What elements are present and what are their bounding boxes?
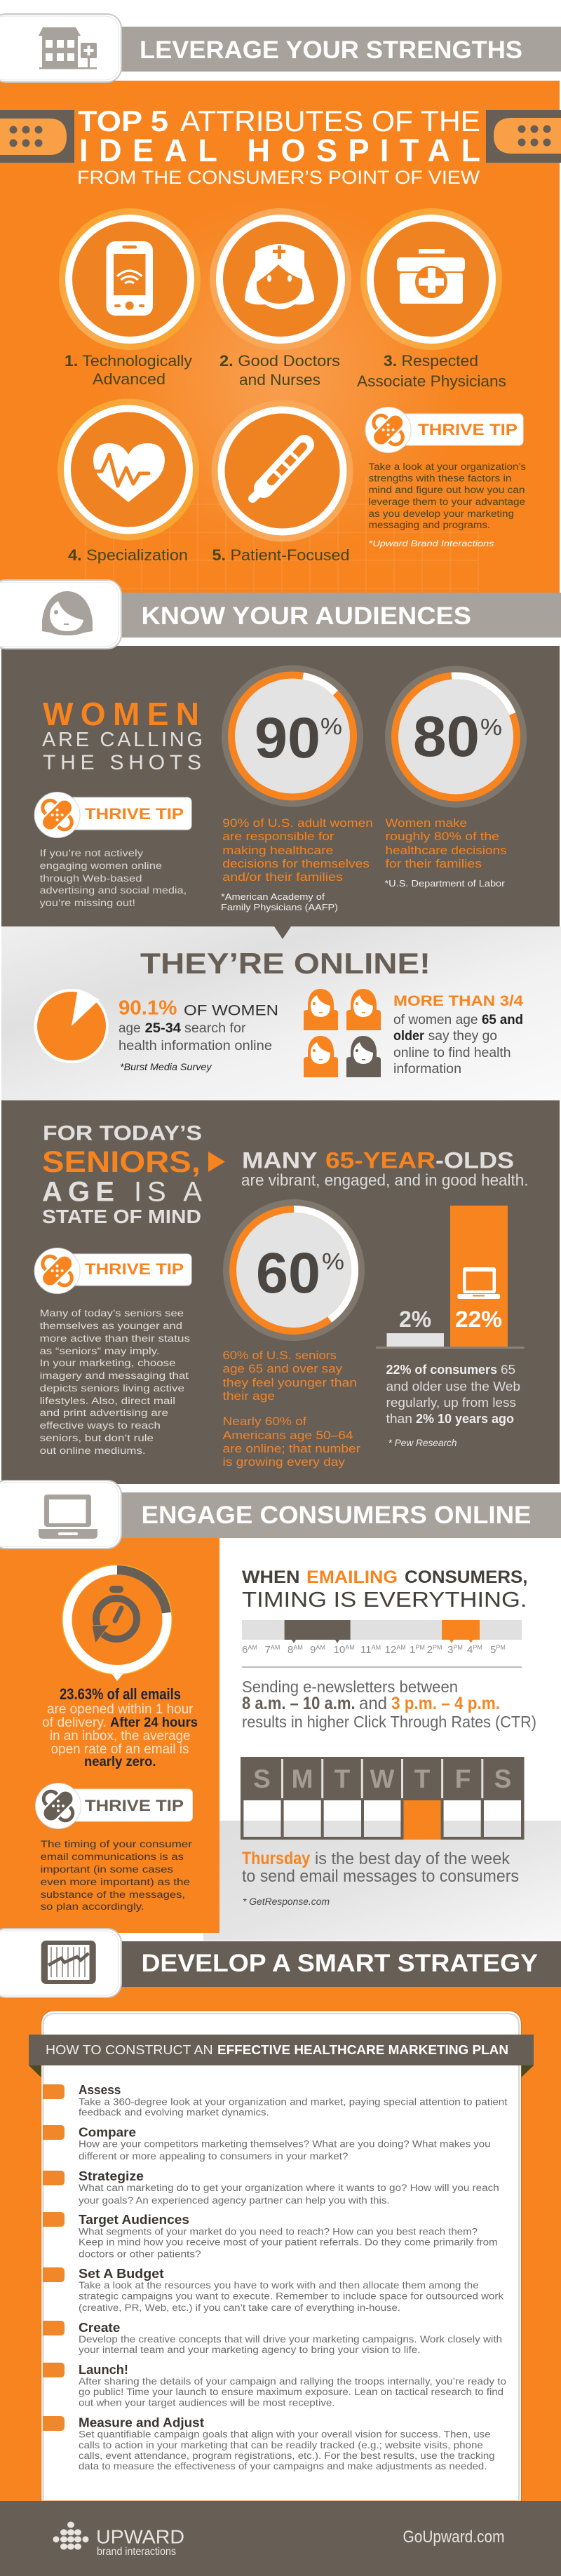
- stat text: 90 percent: are responsible for: [222, 830, 334, 843]
- timeline chart: PM: [415, 1644, 425, 1651]
- stat: 90.1 percent of women: *Burst Media Survey: [120, 1062, 212, 1072]
- panel: women are calling the shots: [1, 646, 560, 926]
- donut: 80 percent: %: [480, 714, 502, 740]
- panel: gray backdrop: [203, 1821, 561, 1941]
- stat: email open rates: After 24 hours: [110, 1715, 198, 1730]
- step: launch: After sharing the details of your campaign and rallying the troops internally, you’re ready to: [79, 2376, 506, 2387]
- stat text: 90 percent: decisions for themselves: [222, 857, 370, 870]
- thrive tip 4: substance of the messages,: [41, 1889, 185, 1900]
- step: launch: go public! Time your launch to ensure maximum exposure. Lean on tactical research to find: [79, 2387, 503, 2397]
- thrive tip 2: THRIVE TIP: [85, 805, 184, 823]
- timeline chart: AM: [396, 1644, 406, 1651]
- thrive tip 1: [365, 407, 526, 548]
- stat: email open rates: in an inbox, the average: [50, 1729, 191, 1744]
- thrive tip 3: out online mediums.: [40, 1445, 146, 1456]
- step: measure and adjust: data to measure the effectiveness of your campaigns and make adjustments as needed.: [79, 2461, 487, 2472]
- thrive tip 3: imagery and messaging that: [40, 1370, 189, 1381]
- thrive tip 4: The timing of your consumer: [41, 1839, 193, 1849]
- step: measure and adjust: calls, event attendance, program registrations, etc.). For the best results, use the tracking: [79, 2450, 495, 2461]
- thrive tip 1: Take a look at your organization’s: [369, 461, 526, 472]
- thrive tip 3: [34, 1248, 191, 1456]
- section header: develop a smart strategy: [0, 1929, 561, 1997]
- step: target audiences: Keep in mind how you receive most of your patient referrals. Do they come primarily from: [79, 2237, 498, 2248]
- headline many 65-year-olds: are vibrant, engaged, and in good health.: [241, 1171, 529, 1189]
- ribbon heading: HOW TO CONSTRUCT AN: [46, 2043, 213, 2057]
- headline many 65-year-olds: [241, 1148, 529, 1189]
- stat text: 90 percent: Family Physicians (AAFP): [221, 902, 338, 912]
- text: e-newsletter timing: 8 a.m. – 10 a.m.: [242, 1694, 356, 1713]
- donut: 90 percent: %: [320, 713, 342, 739]
- attribute 1: technologically advanced: 1. Technologically: [65, 352, 192, 370]
- headline seniors: FOR TODAY’S: [43, 1122, 202, 1145]
- step: create: Develop the creative concepts that will drive your marketing campaigns. Work closely with: [79, 2334, 502, 2345]
- pie chart: 90.1 percent: [34, 989, 108, 1063]
- stat: email open rates: nearly zero.: [84, 1755, 156, 1769]
- stat text: 60 percent: they feel younger than: [223, 1376, 357, 1389]
- headline seniors: IS A: [134, 1177, 202, 1208]
- thrive tip 4: email communications is as: [41, 1852, 184, 1862]
- thrive tip 4: even more important) as the: [41, 1877, 190, 1887]
- step: strategize: [43, 2169, 499, 2206]
- stat: more than 3/4: online to find health: [393, 1046, 511, 1060]
- headline women: ARE CALLING: [42, 729, 203, 751]
- thrive tip 3: depicts seniors living active: [40, 1383, 184, 1394]
- stat: email open rates: are opened within 1 hour: [47, 1702, 194, 1717]
- text: thursday: to send email messages to consumers: [242, 1867, 519, 1886]
- logo: upward brand interactions: brand interactions: [97, 2546, 176, 2558]
- thrive tip 1: mind and figure out how you can: [369, 485, 525, 495]
- headline many 65-year-olds: -OLDS: [435, 1148, 514, 1173]
- headline women: [42, 696, 203, 774]
- thrive tip 4: [35, 1783, 193, 1912]
- main title: IDEAL HOSPITAL: [79, 133, 480, 168]
- stat text: 80 percent: for their families: [386, 857, 482, 870]
- donut: 90 percent: [222, 665, 363, 807]
- thrive tip 1: strengths with these factors in: [369, 473, 512, 484]
- stopwatch donut: [62, 1564, 173, 1681]
- thrive tip 1: THRIVE TIP: [418, 421, 518, 438]
- attribute 2: good doctors and nurses: [210, 208, 351, 389]
- stat: 90.1 percent of women: search for: [184, 1021, 246, 1036]
- panel: they're online: THEY’RE ONLINE!: [140, 947, 431, 980]
- calendar chart: F: [455, 1765, 471, 1793]
- timeline chart: 7: [265, 1644, 271, 1656]
- attribute 3: respected associate physicians: [357, 208, 506, 390]
- panel: marketing plan card: [29, 2011, 534, 2501]
- stat text: 22 percent: and older use the Web: [386, 1380, 520, 1394]
- attribute 1: technologically advanced: [59, 208, 201, 388]
- thrive tip 2: you’re missing out!: [40, 898, 135, 908]
- panel: strategy background: [0, 1987, 561, 2501]
- stat text: 90 percent: and/or their families: [222, 870, 343, 884]
- stat text: 60 percent: Nearly 60% of: [223, 1415, 306, 1428]
- headline seniors: SENIORS,: [42, 1145, 201, 1179]
- thrive tip 2: advertising and social media,: [40, 885, 187, 896]
- calendar chart: [241, 1757, 525, 1840]
- headline seniors: AGE: [42, 1177, 114, 1208]
- donut: 80 percent: 80: [413, 705, 480, 769]
- thrive tip 3: lifestyles. Also, direct mail: [40, 1396, 175, 1406]
- headline seniors: [42, 1122, 225, 1227]
- main title: [77, 104, 480, 188]
- step: assess: feedback and evolving market dynamics.: [79, 2108, 269, 2118]
- headline timing: TIMING IS EVERYTHING.: [242, 1587, 527, 1612]
- stat: 90.1 percent of women: OF WOMEN: [184, 1003, 278, 1019]
- thrive tip 2: through Web-based: [40, 873, 142, 884]
- calendar chart: W: [370, 1765, 395, 1793]
- section header: leverage your strengths: LEVERAGE YOUR STRENGTHS: [140, 36, 522, 64]
- section header: develop a smart strategy: DEVELOP A SMART STRATEGY: [142, 1950, 538, 1977]
- timeline chart: PM: [453, 1644, 463, 1651]
- attribute 5: patient-focused: [212, 400, 353, 564]
- stat text: 60 percent: age 65 and over say: [223, 1362, 343, 1375]
- step: measure and adjust: Set quantifiable campaign goals that align with your overall vision for success. Then, use: [79, 2429, 491, 2440]
- section header: engage consumers online: [0, 1481, 561, 1549]
- stat text: 80 percent: healthcare decisions: [386, 844, 506, 857]
- thrive tip 4: THRIVE TIP: [85, 1797, 184, 1814]
- text: e-newsletter timing: and: [359, 1694, 387, 1713]
- stat: email open rates: [42, 1685, 198, 1769]
- timeline chart: 2: [427, 1644, 433, 1656]
- donut: 80 percent: [385, 666, 527, 808]
- logo: upward brand interactions: [53, 2522, 184, 2558]
- stat: more than 3/4: information: [393, 1062, 461, 1077]
- stat: 90.1 percent of women: 25-34: [145, 1021, 181, 1036]
- step: set a budget: [43, 2267, 503, 2313]
- headline many 65-year-olds: MANY: [242, 1148, 317, 1173]
- stat text: 90 percent: 90% of U.S. adult women: [222, 816, 373, 830]
- timeline chart: AM: [271, 1644, 280, 1651]
- panel: top 5 attributes: [0, 81, 561, 593]
- calendar chart: S: [494, 1765, 511, 1793]
- step: strategize: Strategize: [79, 2169, 144, 2183]
- step: set a budget: Take a look at the resources you have to work with and then allocate them among the: [79, 2280, 479, 2291]
- stat: email open rates: 23.63% of all emails: [60, 1685, 181, 1703]
- icons: four women: [304, 989, 381, 1077]
- panel: timing is everything: [241, 1567, 536, 1907]
- text: thursday: Thursday: [242, 1849, 310, 1868]
- step: compare: different or more appealing to consumers in your market?: [79, 2151, 348, 2162]
- attribute 4: specialization: 4. Specialization: [68, 546, 188, 564]
- stat text: 22 percent: regularly, up from less: [386, 1396, 516, 1410]
- step: assess: [43, 2083, 508, 2118]
- thrive tip 3: In your marketing, choose: [40, 1358, 175, 1368]
- donut: 90 percent: 90: [255, 706, 320, 770]
- stat: 90.1 percent of women: health information online: [119, 1039, 272, 1053]
- stat text: 22 percent: 2% 10 years ago: [416, 1412, 514, 1426]
- text: e-newsletter timing: results in higher Click Through Rates (CTR): [242, 1713, 536, 1731]
- timeline chart: PM: [433, 1644, 442, 1651]
- step: strategize: What can marketing do to get your organization where it wants to go? How will you reach: [79, 2183, 499, 2193]
- attribute 3: respected associate physicians: 3. Respected: [384, 352, 478, 370]
- step: measure and adjust: [43, 2416, 495, 2472]
- thrive tip 2: [34, 793, 191, 908]
- step: compare: [43, 2125, 491, 2162]
- attribute 5: patient-focused: 5. Patient-Focused: [212, 546, 349, 564]
- text: e-newsletter timing: [242, 1678, 536, 1731]
- stat text: 22 percent: * Pew Research: [388, 1438, 457, 1448]
- timeline chart: 1: [410, 1644, 415, 1656]
- step: set a budget: strategic campaigns you want to execute. Remember to include space for outsourced work: [79, 2291, 503, 2302]
- footer: [0, 2501, 561, 2576]
- calendar chart: S: [253, 1765, 271, 1793]
- thrive tip 3: Many of today’s seniors see: [40, 1308, 184, 1319]
- stat text: 60 percent: [223, 1349, 360, 1469]
- timeline chart: 3: [447, 1644, 453, 1656]
- step: create: Create: [79, 2321, 120, 2335]
- thrive tip 3: and print advertising are: [40, 1408, 168, 1418]
- step: launch: out when your target audiences will be most receptive.: [79, 2398, 335, 2408]
- step: launch: [43, 2363, 506, 2408]
- step: compare: How are your competitors marketing themselves? What are you doing? What makes you: [79, 2139, 491, 2150]
- stat: more than 3/4: of women age: [393, 1013, 478, 1027]
- stat: more than 3/4: say they go: [428, 1029, 497, 1044]
- thrive tip 1: *Upward Brand Interactions: [369, 539, 494, 548]
- stat text: 80 percent: Women make: [386, 816, 467, 830]
- ribbon heading: [29, 2035, 534, 2077]
- stat text: 80 percent: [384, 816, 506, 889]
- thrive tip 2: If you’re not actively: [40, 848, 143, 858]
- headline women: WOMEN: [43, 696, 199, 732]
- timeline chart: AM: [248, 1644, 257, 1651]
- bar chart: 2 percent versus 22 percent: 2%: [399, 1307, 431, 1332]
- thrive tip 2: engaging women online: [40, 861, 162, 871]
- stat text: 60 percent: is growing every day: [223, 1455, 346, 1469]
- panel: seniors: [1, 1100, 560, 1484]
- headline timing: CONSUMERS,: [405, 1567, 527, 1587]
- step: measure and adjust: Measure and Adjust: [79, 2416, 204, 2430]
- calendar chart: T: [334, 1765, 351, 1793]
- step: target audiences: Target Audiences: [79, 2213, 189, 2227]
- timeline chart: 9: [310, 1644, 316, 1656]
- step: target audiences: What segments of your market do you need to reach? How can you best reach them?: [79, 2227, 478, 2237]
- step: assess: Take a 360-degree look at your organization and market, paying special attention to patient: [79, 2097, 508, 2108]
- thrive tip 3: as “seniors” may imply.: [40, 1346, 159, 1356]
- main title: FROM THE CONSUMER’S POINT OF VIEW: [77, 167, 480, 188]
- step: assess: Assess: [79, 2083, 121, 2097]
- stat text: 60 percent: are online; that number: [223, 1442, 360, 1455]
- panel: email open rates: [0, 1538, 219, 1933]
- timeline chart: 12: [384, 1644, 396, 1656]
- website: GoUpward.com: [403, 2528, 505, 2547]
- stat text: 90 percent: [221, 816, 373, 912]
- stat text: 22 percent: 22% of consumers: [386, 1363, 497, 1377]
- headline timing: WHEN: [242, 1567, 300, 1587]
- stat: more than 3/4: MORE THAN 3/4: [393, 993, 523, 1009]
- step: compare: Compare: [79, 2126, 136, 2140]
- timeline chart: PM: [496, 1644, 506, 1651]
- attribute 1: technologically advanced: Advanced: [93, 370, 165, 388]
- stat: 90.1 percent of women: age: [119, 1021, 140, 1036]
- stat text: 90 percent: *American Academy of: [221, 891, 325, 902]
- step: launch: Launch!: [79, 2363, 128, 2377]
- step: set a budget: (creative, PR, Web, etc.) if you can’t take care of everything in-house.: [79, 2302, 400, 2313]
- donut: 60 percent: [223, 1199, 365, 1341]
- timeline chart: AM: [293, 1644, 303, 1651]
- attribute 3: respected associate physicians: Associate Physicians: [357, 372, 506, 390]
- bar chart: 2 percent versus 22 percent: 22%: [455, 1307, 502, 1332]
- main title: TOP 5: [78, 104, 168, 137]
- stat: more than 3/4: [393, 993, 523, 1077]
- step: set a budget: Set A Budget: [79, 2267, 164, 2281]
- timeline chart: 10: [334, 1644, 345, 1656]
- step: measure and adjust: calls to action in your marketing that can be readily tracked (e.g.; website visits, phone: [79, 2440, 483, 2450]
- band-aid right: [486, 110, 561, 163]
- timeline chart: PM: [473, 1644, 482, 1651]
- section header: know your audiences: KNOW YOUR AUDIENCES: [142, 602, 471, 630]
- thrive tip 3: effective ways to reach: [40, 1420, 161, 1431]
- stat text: 22 percent: than: [386, 1412, 412, 1426]
- timeline chart: 6: [242, 1644, 248, 1656]
- stat text: 80 percent: *U.S. Department of Labor: [384, 878, 506, 889]
- section header: leverage your strengths: [0, 14, 561, 82]
- text: e-newsletter timing: Sending e-newsletters between: [242, 1678, 458, 1696]
- step: strategize: your goals? An experienced agency partner can help you with this.: [79, 2195, 390, 2206]
- section header: engage consumers online: ENGAGE CONSUMERS ONLINE: [142, 1502, 532, 1529]
- stat: 90.1 percent of women: 90.1%: [119, 997, 177, 1020]
- step: create: [43, 2321, 502, 2355]
- thrive tip 3: THRIVE TIP: [85, 1260, 184, 1278]
- stat: email open rates: of delivery.: [42, 1715, 107, 1730]
- timeline chart: AM: [316, 1644, 325, 1651]
- stat text: 90 percent: making healthcare: [222, 844, 333, 857]
- timeline chart: AM: [345, 1644, 355, 1651]
- ribbon heading: EFFECTIVE HEALTHCARE MARKETING PLAN: [217, 2043, 508, 2057]
- stat: more than 3/4: 65 and: [482, 1013, 523, 1027]
- panel: they're online: [1, 926, 561, 1100]
- timeline chart: 5: [490, 1644, 496, 1656]
- thrive tip 3: more active than their status: [40, 1333, 190, 1344]
- bar chart: 2 percent versus 22 percent: [376, 1206, 525, 1349]
- main title: ATTRIBUTES OF THE: [180, 104, 480, 137]
- stat text: 60 percent: 60% of U.S. seniors: [223, 1349, 337, 1362]
- stat: 90.1 percent of women: [119, 997, 278, 1072]
- text: thursday: * GetResponse.com: [243, 1896, 330, 1907]
- thrive tip 1: leverage them to your advantage: [369, 497, 525, 507]
- text: thursday: [242, 1849, 519, 1907]
- band-aid left: [0, 110, 74, 163]
- step: target audiences: [43, 2212, 498, 2260]
- stat text: 60 percent: Americans age 50–64: [223, 1429, 353, 1442]
- timeline chart: 8: [288, 1644, 293, 1656]
- attribute 2: good doctors and nurses: and Nurses: [239, 371, 320, 389]
- headline seniors: STATE OF MIND: [42, 1206, 201, 1227]
- stat text: 80 percent: roughly 80% of the: [386, 830, 499, 843]
- logo: upward brand interactions: UPWARD: [96, 2526, 184, 2548]
- thrive tip 4: important (in some cases: [41, 1864, 173, 1875]
- timeline chart: [242, 1620, 522, 1656]
- thrive tip 3: themselves as younger and: [40, 1321, 182, 1331]
- section header: know your audiences: [0, 580, 561, 649]
- attribute 2: good doctors and nurses: 2. Good Doctors: [219, 352, 340, 370]
- headline timing: [242, 1567, 527, 1612]
- timeline chart: 4: [467, 1644, 473, 1656]
- step: target audiences: doctors or other patients?: [79, 2249, 201, 2260]
- stat text: 60 percent: their age: [223, 1389, 275, 1403]
- thrive tip 4: so plan accordingly.: [41, 1901, 144, 1912]
- step: create: your internal team and your marketing agency to bring your vision to life.: [79, 2345, 421, 2355]
- donut: 60 percent: 60: [256, 1241, 320, 1305]
- text: thursday: is the best day of the week: [315, 1849, 511, 1868]
- stat text: 22 percent: [386, 1363, 520, 1448]
- calendar chart: T: [414, 1765, 431, 1793]
- headline timing: EMAILING: [306, 1567, 398, 1587]
- thrive tip 3: seniors, but don’t rule: [40, 1433, 154, 1443]
- timeline chart: 11: [360, 1644, 372, 1656]
- calendar chart: M: [292, 1765, 313, 1793]
- text: e-newsletter timing: 3 p.m. – 4 p.m.: [391, 1694, 500, 1713]
- donut: 60 percent: %: [322, 1248, 344, 1274]
- thrive tip 1: as you develop your marketing: [369, 508, 514, 519]
- stat: email open rates: open rate of an email is: [50, 1742, 189, 1757]
- stat: more than 3/4: older: [393, 1029, 425, 1044]
- thrive tip 1: messaging and programs.: [369, 520, 490, 530]
- attribute 4: specialization: [58, 398, 199, 564]
- headline women: THE SHOTS: [43, 751, 201, 774]
- headline many 65-year-olds: 65-YEAR: [325, 1148, 435, 1173]
- stat text: 22 percent: 65: [501, 1363, 515, 1377]
- timeline chart: AM: [372, 1644, 381, 1651]
